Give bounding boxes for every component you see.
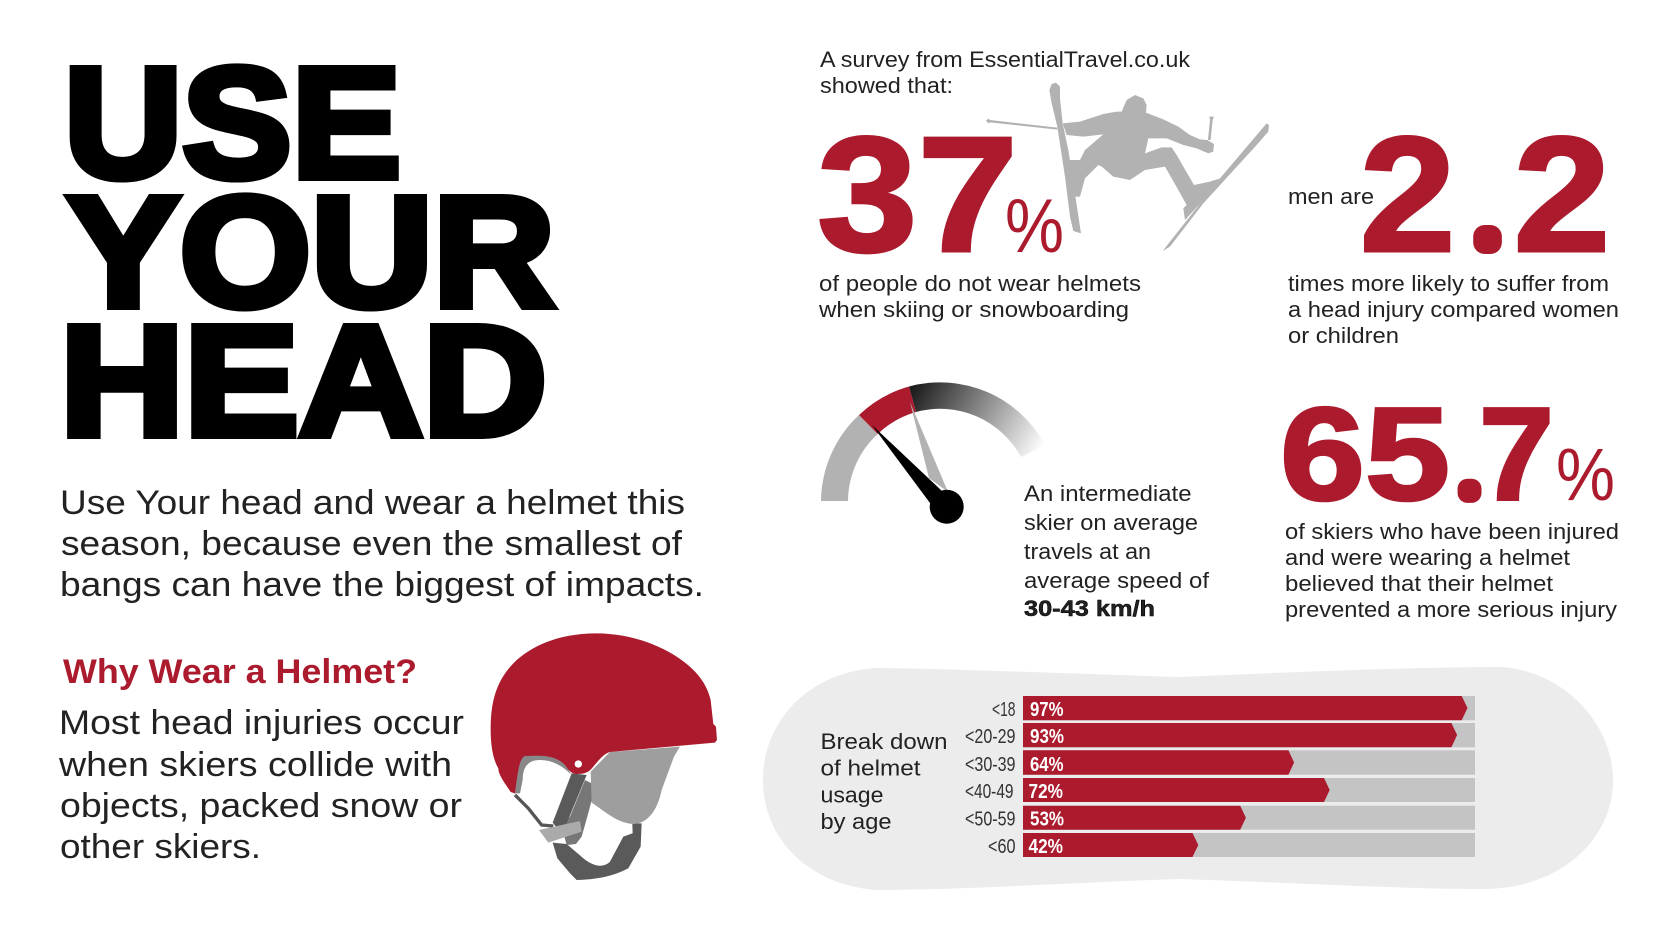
bar: 60, 42% — [988, 833, 1475, 858]
bar: 40-49, 72%: 72% — [1028, 781, 1063, 803]
bar: 50-59, 53%: <50-59 — [965, 808, 1016, 830]
helmet chin strap — [553, 823, 642, 880]
intro text: Use Your head and wear a helmet this — [60, 484, 685, 522]
stat: 37 percent: when skiing or snowboarding — [818, 297, 1129, 322]
body text: head injuries: other skiers. — [60, 828, 261, 866]
body text: head injuries — [58, 704, 464, 866]
helmet ear trim — [514, 754, 572, 793]
chart title: of helmet — [820, 756, 920, 780]
gauge grey needle — [910, 402, 948, 492]
stat: 65.7 percent: 7 — [1479, 380, 1554, 528]
intro text — [60, 484, 704, 604]
speed text: average speed of — [1024, 568, 1210, 593]
gauge pivot — [930, 490, 964, 524]
bar: 40-49, 72%: <40-49 — [965, 781, 1014, 803]
chart title: by age — [820, 809, 892, 834]
bar: 30-39, 64%: 64% — [1030, 754, 1064, 776]
gauge grey arc — [821, 415, 878, 501]
icon: ski helmet — [491, 633, 717, 880]
body text: head injuries: when skiers collide with — [58, 746, 452, 784]
bar: 30-39, 64%: <30-39 — [965, 754, 1016, 776]
speed text: An intermediate — [1024, 481, 1192, 506]
speed text — [1024, 481, 1210, 621]
intro text: bangs can have the biggest of impacts. — [60, 566, 704, 604]
bar: 50-59, 53% — [965, 806, 1475, 830]
bar chart — [965, 696, 1475, 858]
icon: speed gauge — [821, 382, 1045, 524]
right ski — [1163, 123, 1269, 251]
stat: men 2.2 times: 2 — [1513, 103, 1610, 286]
chart title: Break down — [820, 729, 948, 754]
stat: men 2.2 times: . — [1482, 208, 1493, 252]
intro text: season, because even the smallest of — [61, 525, 683, 563]
chart title: usage — [820, 782, 884, 808]
title: USE — [64, 36, 401, 211]
stat: 65.7 percent: and were wearing a helmet — [1285, 545, 1570, 570]
helmet side strap — [553, 773, 587, 828]
gauge gradient arc — [909, 382, 1045, 457]
bar: 30-39, 64% — [965, 750, 1475, 776]
stat: 37 percent — [817, 103, 1141, 322]
speed text: skier on average — [1024, 510, 1198, 535]
survey intro text: showed that: — [820, 73, 953, 98]
bar: 60, 42%: 42% — [1028, 836, 1063, 858]
stat: 65.7 percent: % — [1556, 433, 1615, 516]
stat: 65.7 percent: prevented a more serious injury — [1285, 597, 1617, 622]
title: YOUR — [67, 165, 555, 340]
helmet thin strap — [515, 795, 553, 826]
stat: men 2.2 times: 2 — [1360, 103, 1456, 286]
bar: 50-59, 53%: 53% — [1030, 808, 1064, 830]
stat: 65.7 percent: . — [1465, 467, 1474, 500]
panel: snowboard helmet usage by age — [763, 667, 1613, 890]
survey intro text — [820, 47, 1191, 98]
heading: why wear a helmet: Why Wear a Helmet? — [63, 653, 417, 691]
bar: 20-29, 93%: <20-29 — [965, 726, 1016, 748]
bar: under 18, 97%: <18 — [992, 699, 1016, 721]
title — [60, 36, 555, 469]
stat: 65.7 percent — [1280, 380, 1619, 622]
stat: men 2.2 times: a head injury compared women — [1288, 297, 1619, 322]
stat: 37 percent: % — [1005, 184, 1064, 269]
gauge red arc — [859, 386, 916, 434]
left pole — [986, 119, 1057, 130]
gauge black needle — [872, 425, 943, 503]
skier body — [1063, 95, 1220, 220]
bar: 40-49, 72% — [965, 778, 1475, 803]
stat: men 2.2 times: or children — [1288, 323, 1399, 348]
helmet buckle — [539, 821, 582, 843]
bar: 60, 42%: <60 — [988, 836, 1016, 858]
bar: 20-29, 93% — [965, 723, 1475, 748]
body text: head injuries: objects, packed snow or — [60, 787, 462, 825]
left ski — [1049, 83, 1081, 233]
stat: men 2.2 times: times more likely to suffer from — [1288, 271, 1609, 296]
stat: men 2.2 times: men are — [1288, 184, 1374, 209]
icon: skier silhouette — [986, 83, 1269, 251]
body text: head injuries: Most head injuries occur — [59, 704, 464, 742]
right pole — [1208, 117, 1214, 140]
chart title — [820, 729, 948, 834]
speed text: travels at an — [1024, 539, 1151, 564]
stat: 37 percent: 37 — [817, 103, 1018, 286]
bar: under 18, 97% — [992, 696, 1475, 721]
helmet shell — [491, 633, 717, 793]
stat: 65.7 percent: believed that their helmet — [1285, 571, 1553, 596]
bar: under 18, 97%: 97% — [1030, 699, 1064, 721]
helmet side pad — [562, 780, 594, 845]
survey intro text: A survey from EssentialTravel.co.uk — [820, 47, 1191, 72]
title: HEAD — [60, 294, 547, 469]
snowboard background — [763, 667, 1613, 890]
helmet rivet — [575, 760, 582, 768]
bar: 20-29, 93%: 93% — [1030, 726, 1064, 748]
helmet ear pad — [591, 747, 680, 824]
stat: 65.7 percent: 65 — [1280, 380, 1450, 528]
stat: men 2.2 times — [1288, 103, 1619, 348]
speed text: 30-43 km/h — [1024, 596, 1155, 621]
stat: 65.7 percent: of skiers who have been injured — [1285, 519, 1619, 544]
stat: 37 percent: of people do not wear helmets — [819, 271, 1141, 296]
